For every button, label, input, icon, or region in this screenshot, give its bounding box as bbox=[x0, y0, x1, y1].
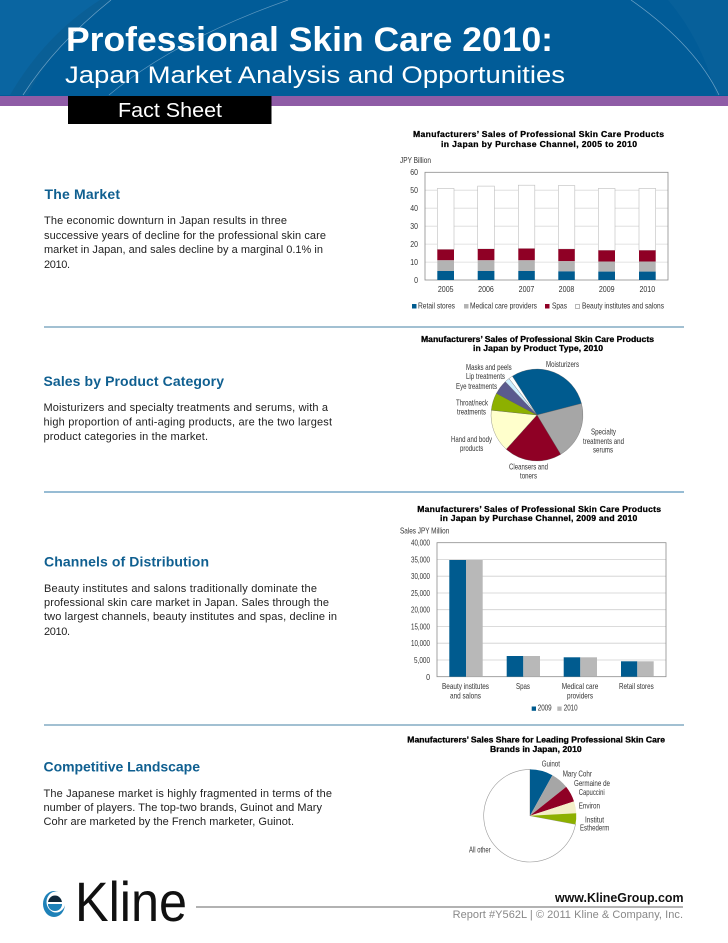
pie labels: treatments and bbox=[583, 436, 624, 446]
chart title: in Japan by Purchase Channel, 2009 and 2010 bbox=[440, 513, 638, 523]
x axis labels: Beauty institutes bbox=[442, 681, 489, 691]
pie labels: Hand and body bbox=[451, 434, 493, 444]
stacked bar chart: purchase channel 2005 to 2010: 20 bbox=[410, 239, 418, 249]
pie labels: Masks and peels bbox=[466, 362, 512, 372]
bars bbox=[449, 560, 654, 677]
heading: sales by product category: Sales by Product Category bbox=[44, 373, 224, 389]
chart title: Manufacturers’ Sales Share for Leading Professional Skin Care bbox=[407, 735, 665, 745]
pie slices bbox=[484, 769, 576, 862]
pie chart: product type 2010 bbox=[421, 334, 654, 481]
stacked bar chart: purchase channel 2005 to 2010: 10 bbox=[410, 257, 418, 267]
text block: sales by product category body: product categories in the market. bbox=[44, 431, 208, 443]
header banner bbox=[0, 0, 728, 106]
chart title: Brands in Japan, 2010 bbox=[490, 744, 582, 754]
stacked bar chart: purchase channel 2005 to 2010: 0 bbox=[414, 275, 418, 285]
pie labels: Environ bbox=[579, 801, 600, 811]
x axis labels: providers bbox=[567, 690, 593, 700]
text block: sales by product category body bbox=[44, 402, 332, 443]
chart title bbox=[407, 735, 665, 754]
x axis labels: 2005 bbox=[438, 284, 454, 294]
panel: competitive landscape text bbox=[44, 759, 332, 828]
legend: 2010 bbox=[564, 703, 578, 713]
panel: sales by product category text bbox=[44, 373, 332, 443]
stacked bar chart: purchase channel 2005 to 2010: 60 bbox=[410, 167, 418, 177]
bar chart: purchase channel 2009 and 2010: Sales JPY Million bbox=[400, 526, 450, 536]
legend: Medical care providers bbox=[470, 300, 537, 310]
pie slices bbox=[491, 369, 583, 461]
text block: the market body: successive years of decline for the professional skin care bbox=[44, 230, 326, 242]
bars bbox=[437, 185, 656, 280]
bar chart: purchase channel 2009 and 2010: 35,000 bbox=[411, 554, 430, 564]
stacked bar chart: purchase channel 2005 to 2010: 50 bbox=[410, 185, 418, 195]
x axis labels: Medical care bbox=[562, 681, 599, 691]
pie labels: Throat/neck bbox=[456, 397, 489, 407]
pie labels: Eye treatments bbox=[456, 381, 497, 391]
bar chart: purchase channel 2009 and 2010: 40,000 bbox=[411, 538, 430, 548]
bar chart: purchase channel 2009 and 2010: 0 bbox=[426, 672, 430, 682]
chart title bbox=[421, 334, 654, 353]
legend: 2009 bbox=[538, 703, 552, 713]
pie labels: Guinot bbox=[542, 759, 560, 769]
text block: the market body: market in Japan, and sales decline by a marginal 0.1% in bbox=[44, 244, 323, 256]
x axis labels: 2008 bbox=[559, 284, 575, 294]
pie labels: Institut bbox=[585, 815, 604, 825]
text block: channels of distribution body: 2010. bbox=[44, 626, 70, 638]
text block: channels of distribution body: Beauty institutes and salons traditionally dominate the bbox=[44, 583, 317, 595]
x axis labels: Retail stores bbox=[619, 681, 654, 691]
pie labels: Lip treatments bbox=[466, 371, 505, 381]
pie labels: Moisturizers bbox=[546, 359, 579, 369]
text block: sales by product category body: Moisturizers and specialty treatments and serums, with a bbox=[44, 402, 329, 414]
fact sheet tag: Fact Sheet bbox=[118, 100, 222, 122]
legend: Retail stores bbox=[418, 300, 455, 310]
x axis labels: Spas bbox=[516, 681, 530, 691]
bar chart: purchase channel 2009 and 2010 bbox=[400, 504, 666, 713]
legend: Beauty institutes and salons bbox=[582, 300, 664, 310]
x axis labels bbox=[438, 284, 655, 294]
fact sheet tag bbox=[68, 96, 272, 124]
text block: the market body: 2010. bbox=[44, 259, 70, 271]
text block: channels of distribution body bbox=[44, 583, 337, 638]
heading: competitive landscape: Competitive Landscape bbox=[44, 759, 200, 775]
text block: channels of distribution body: two largest channels, beauty institutes and spas, decline in bbox=[44, 611, 337, 623]
chart title: Manufacturers’ Sales of Professional Skin Care Products bbox=[417, 504, 661, 514]
chart title: in Japan by Purchase Channel, 2005 to 2010 bbox=[441, 139, 637, 149]
bar chart: purchase channel 2009 and 2010: 25,000 bbox=[411, 588, 430, 598]
stacked bar chart: purchase channel 2005 to 2010: JPY Billion bbox=[400, 155, 431, 165]
x axis labels: 2007 bbox=[519, 284, 535, 294]
x axis labels: 2009 bbox=[599, 284, 615, 294]
text block: competitive landscape body: Cohr are marketed by the French marketer, Guinot. bbox=[44, 816, 294, 828]
text block: the market body bbox=[44, 215, 326, 271]
bar chart: purchase channel 2009 and 2010: 5,000 bbox=[414, 655, 430, 665]
icon: logo swirl bbox=[43, 891, 66, 917]
chart title: Manufacturers’ Sales of Professional Skin Care Products bbox=[413, 129, 664, 139]
text block: competitive landscape body: number of players. The top-two brands, Guinot and Mary bbox=[44, 802, 322, 814]
x axis labels: 2006 bbox=[478, 284, 494, 294]
stacked bar chart: purchase channel 2005 to 2010: 30 bbox=[410, 221, 418, 231]
footer logo: Kline: Kline bbox=[75, 870, 187, 933]
text block: competitive landscape body bbox=[44, 788, 332, 828]
footer website: www.KlineGroup.com bbox=[554, 890, 684, 905]
bar chart: purchase channel 2009 and 2010: 10,000 bbox=[411, 638, 430, 648]
subtitle: Japan Market Analysis and Opportunities bbox=[65, 62, 565, 89]
pie labels: serums bbox=[593, 445, 613, 455]
pie labels: All other bbox=[469, 844, 491, 854]
pie labels: treatments bbox=[457, 407, 486, 417]
pie labels: Cleansers and bbox=[509, 461, 548, 471]
pie labels bbox=[469, 759, 610, 854]
pie labels: Esthederm bbox=[580, 822, 609, 832]
pie labels: Mary Cohr bbox=[563, 769, 592, 779]
x axis labels: and salons bbox=[450, 690, 481, 700]
stacked bar chart: purchase channel 2005 to 2010 bbox=[400, 129, 668, 310]
chart title: in Japan by Product Type, 2010 bbox=[473, 343, 603, 353]
text block: the market body: The economic downturn in Japan results in three bbox=[44, 215, 287, 227]
x axis labels bbox=[442, 681, 654, 700]
pie labels: toners bbox=[520, 471, 537, 481]
pie chart: leading brands 2010 bbox=[407, 735, 665, 862]
pie labels: products bbox=[460, 443, 483, 453]
legend: Spas bbox=[552, 300, 567, 310]
pie labels: Specialty bbox=[591, 427, 617, 437]
footer report reference: Report #Y562L | © 2011 Kline & Company, Inc. bbox=[453, 909, 683, 921]
legend bbox=[532, 703, 578, 713]
text block: channels of distribution body: professional skin care market in Japan. Sales through the bbox=[44, 597, 329, 609]
pie labels bbox=[451, 359, 624, 481]
bar chart: purchase channel 2009 and 2010: 30,000 bbox=[411, 571, 430, 581]
chart title: Manufacturers’ Sales of Professional Skin Care Products bbox=[421, 334, 654, 344]
x axis labels: 2010 bbox=[639, 284, 655, 294]
bar chart: purchase channel 2009 and 2010: 20,000 bbox=[411, 605, 430, 615]
stacked bar chart: purchase channel 2005 to 2010: 40 bbox=[410, 203, 418, 213]
legend bbox=[412, 300, 664, 310]
heading: channels of distribution: Channels of Distribution bbox=[44, 554, 209, 570]
pie labels: Germaine de bbox=[574, 778, 610, 788]
pie labels: Capuccini bbox=[579, 787, 605, 797]
bar chart: purchase channel 2009 and 2010: 15,000 bbox=[411, 622, 430, 632]
text block: sales by product category body: high proportion of anti-aging products, are the two largest bbox=[44, 416, 332, 428]
chart title bbox=[413, 129, 664, 149]
panel: channels of distribution text bbox=[44, 554, 337, 638]
title: Professional Skin Care 2010: bbox=[66, 21, 553, 59]
heading: the market: The Market bbox=[44, 186, 120, 202]
panel: the market text bbox=[44, 186, 326, 271]
chart title bbox=[417, 504, 661, 523]
text block: competitive landscape body: The Japanese market is highly fragmented in terms of the bbox=[44, 788, 332, 800]
